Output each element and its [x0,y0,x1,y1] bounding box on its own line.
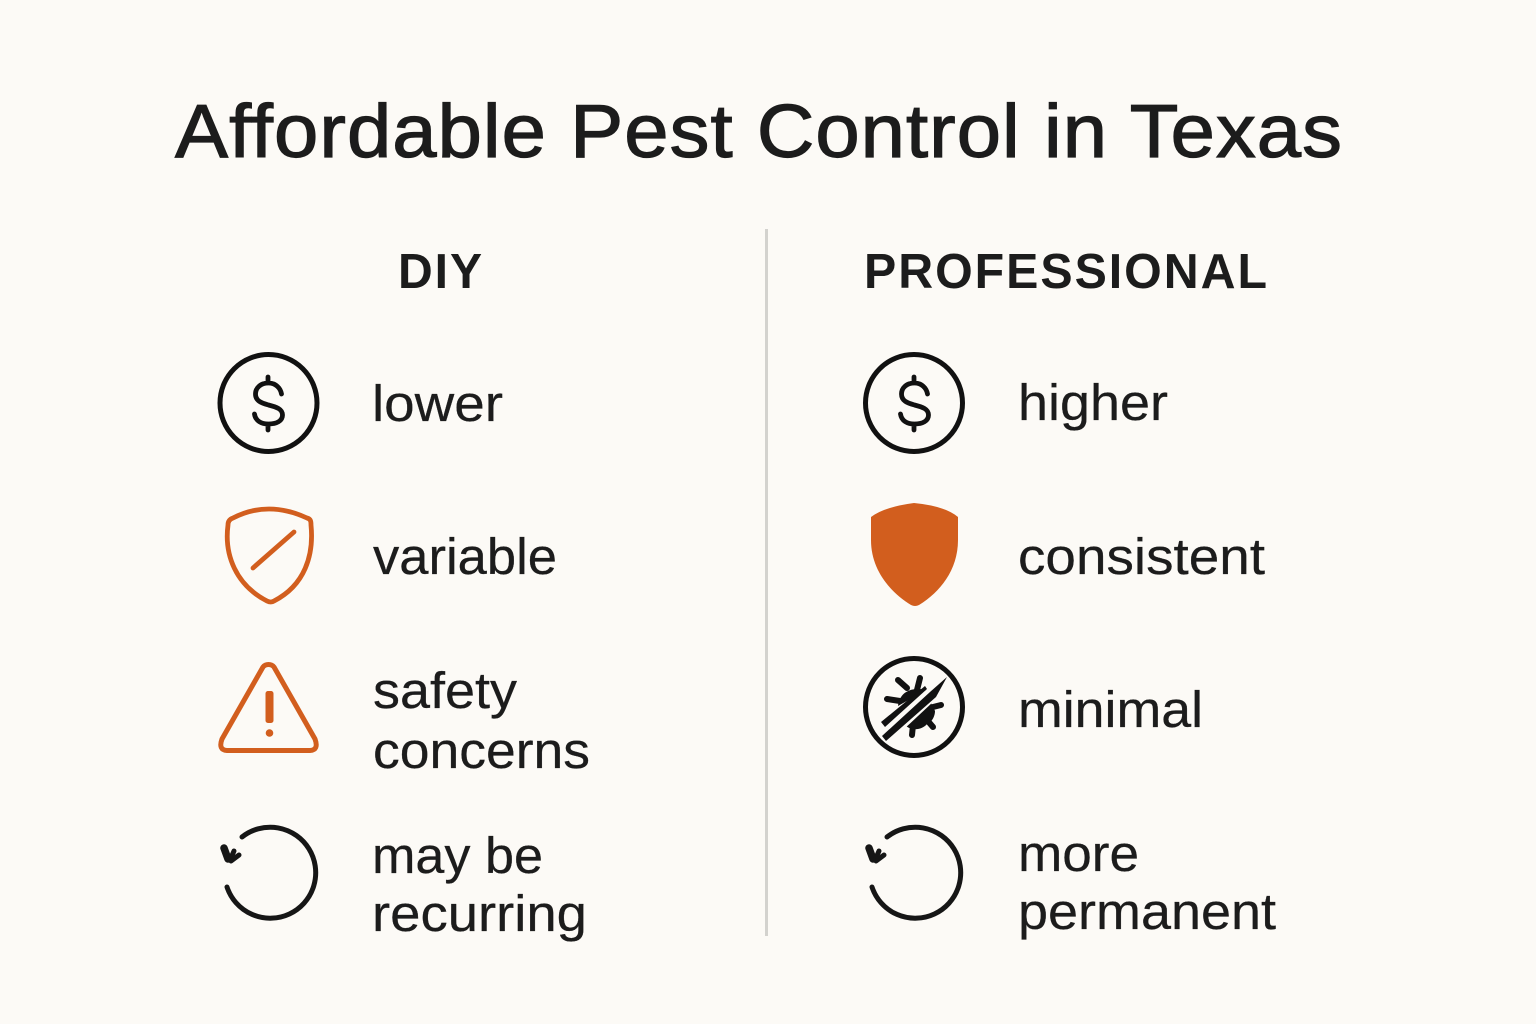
icon: circular arrow [224,827,316,918]
icon: circular arrow [869,827,961,918]
icon: solid shield [871,503,958,606]
icon: warning triangle [221,664,316,750]
icon: outlined shield with slash [227,509,312,602]
icon: dollar [220,354,317,452]
icon: crossed-out bug [866,658,962,756]
row: may be recurring [224,827,587,942]
center divider [765,229,768,936]
label: more permanent: permanent [1018,883,1276,940]
heading: PROFESSIONAL: PROFESSIONAL [864,245,1269,299]
row: cost lower [220,354,503,452]
row: more permanent [869,825,1276,940]
title: Affordable Pest Control in Texas [175,89,1343,173]
panel: DIY column [220,245,590,942]
label: may be recurring: recurring [372,885,587,942]
label: more permanent: more [1018,825,1139,882]
row: effectiveness consistent [871,503,1265,606]
label: consistent: consistent [1018,528,1265,585]
label: variable: variable [373,528,557,585]
row: effectiveness variable [227,509,557,602]
row: cost higher [866,354,1168,452]
label: safety concerns: safety [373,662,518,719]
row: minimal [866,658,1203,756]
label: minimal: minimal [1018,681,1203,738]
label: may be recurring: may be [372,827,543,884]
panel: Professional column [864,245,1276,940]
icon: dollar [866,354,962,452]
label: safety concerns: concerns [373,722,590,779]
label: higher: higher [1018,374,1168,431]
label: lower: lower [372,375,503,432]
heading: DIY: DIY [398,245,484,299]
row: safety concerns [221,662,590,779]
